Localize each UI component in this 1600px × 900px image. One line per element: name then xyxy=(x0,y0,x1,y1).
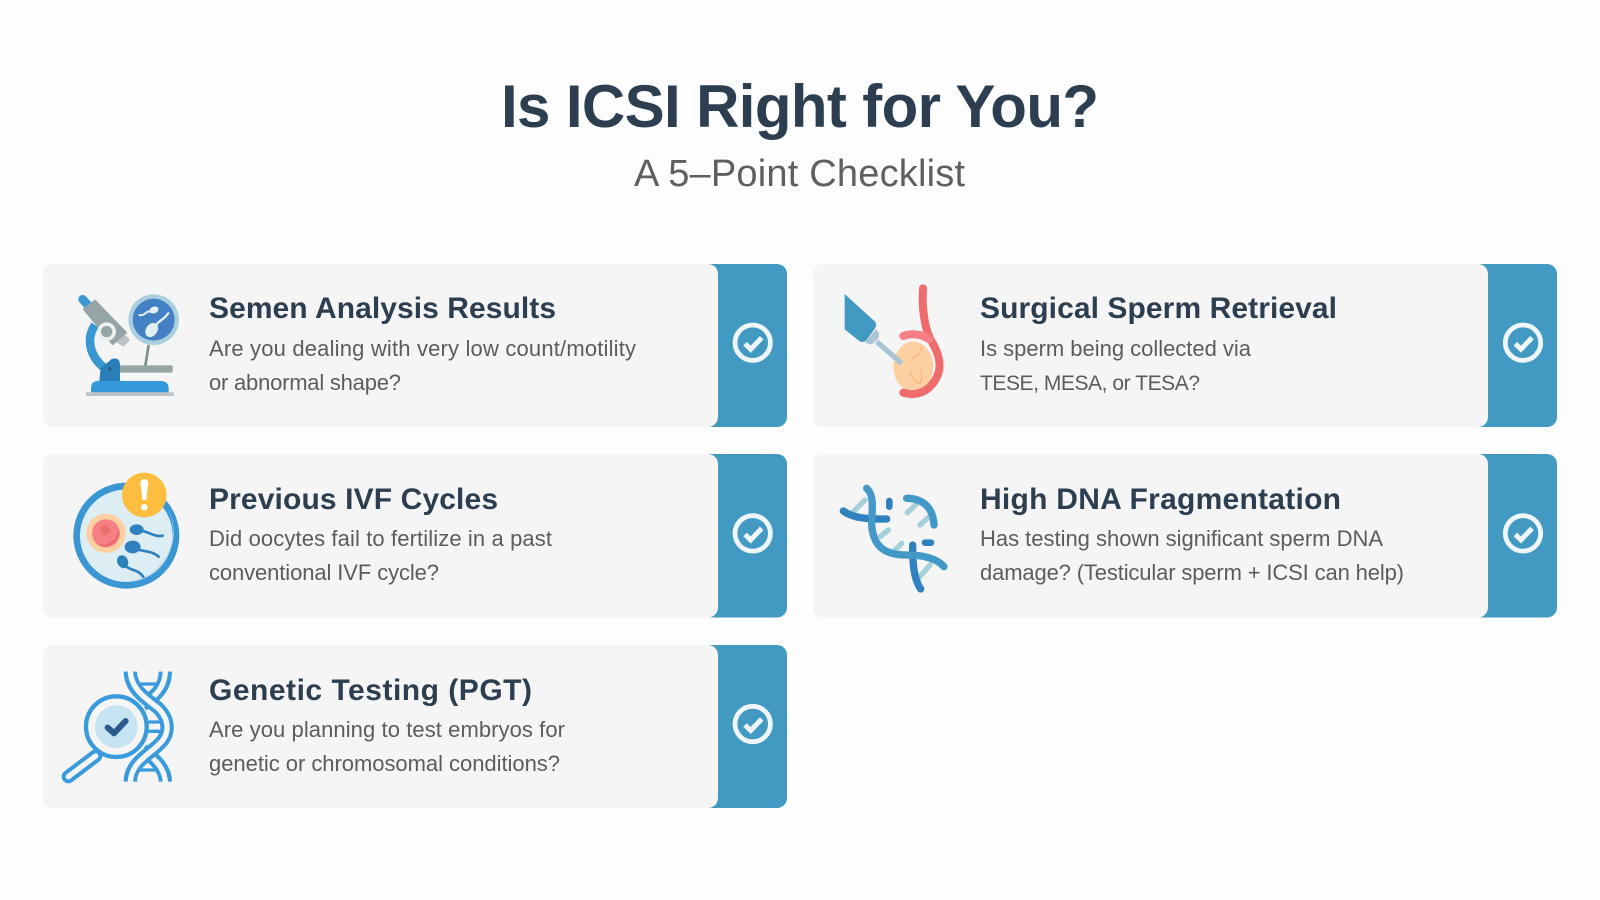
description: Are you dealing with very low count/motility xyxy=(209,336,636,361)
description line 2: or abnormal shape? xyxy=(209,370,401,395)
description line 2: genetic or chromosomal conditions? xyxy=(209,751,560,776)
description: Has testing shown significant sperm DNA xyxy=(980,526,1383,551)
icon: testis with needle xyxy=(845,288,940,394)
icon: check xyxy=(735,706,770,742)
heading: Previous IVF Cycles xyxy=(209,483,498,516)
icon: check xyxy=(1505,325,1541,360)
panel: genetic testing xyxy=(43,645,787,808)
description line 2: damage? (Testicular sperm + ICSI can help) xyxy=(980,560,1404,585)
subtitle: A 5–Point Checklist xyxy=(634,153,965,195)
title: Is ICSI Right for You? xyxy=(501,73,1099,140)
description: Did oocytes fail to fertilize in a past xyxy=(209,526,552,551)
heading: High DNA Fragmentation xyxy=(980,483,1341,516)
panel: surgical sperm retrieval xyxy=(813,264,1557,427)
panel: high dna fragmentation xyxy=(813,454,1557,618)
heading: Genetic Testing (PGT) xyxy=(209,674,532,707)
panel: previous ivf cycles xyxy=(43,454,787,618)
description line 2: TESE, MESA, or TESA? xyxy=(980,372,1200,395)
icon: microscope xyxy=(83,294,179,396)
icon: check xyxy=(1505,516,1541,551)
icon: magnifier over dna xyxy=(68,670,167,783)
icon: fragmented dna xyxy=(843,488,944,589)
description: Is sperm being collected via xyxy=(980,336,1252,361)
heading: Surgical Sperm Retrieval xyxy=(980,292,1337,325)
panel: semen analysis results xyxy=(43,264,787,427)
description line 2: conventional IVF cycle? xyxy=(209,560,439,585)
description: Are you planning to test embryos for xyxy=(209,717,565,742)
icon: check xyxy=(735,325,770,360)
heading: Semen Analysis Results xyxy=(209,292,556,325)
icon: check xyxy=(735,516,770,551)
icon: petri dish with alert xyxy=(77,473,176,585)
